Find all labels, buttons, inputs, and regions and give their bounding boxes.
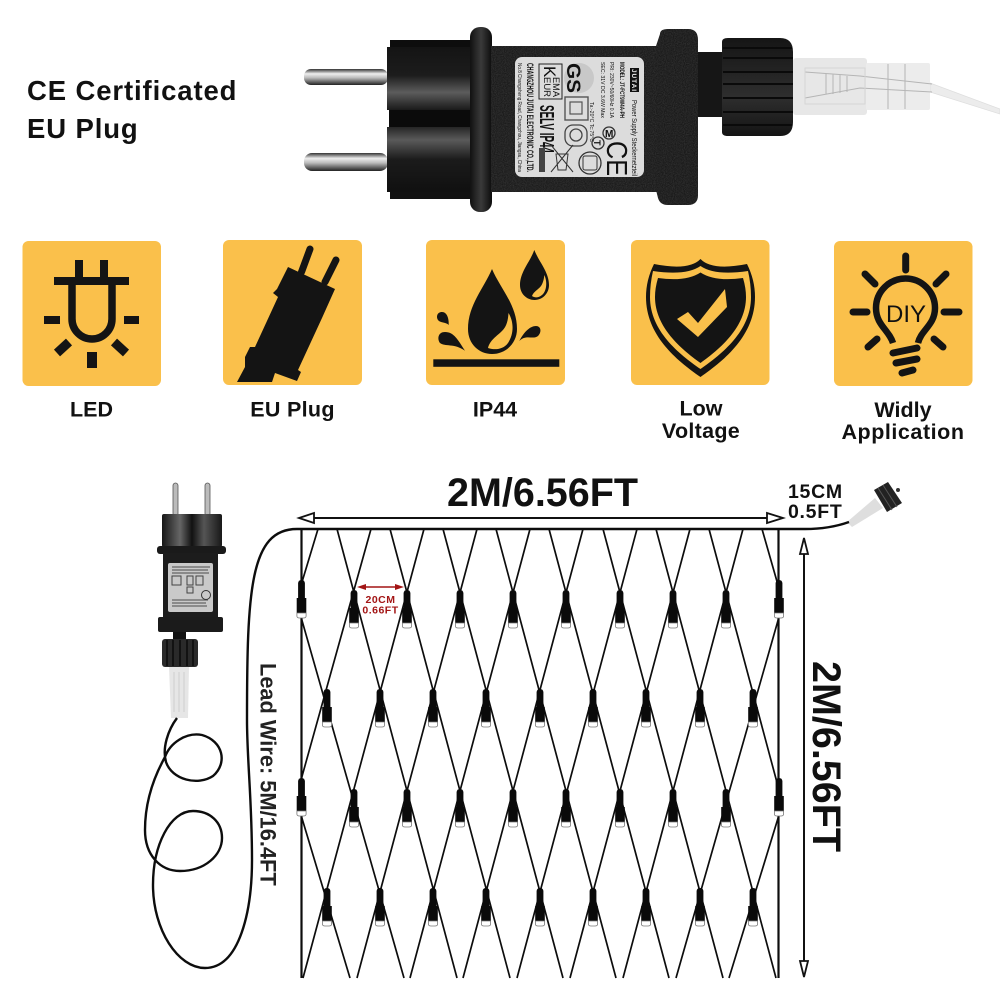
label: 15CM 0.5FT: 15CM <box>788 481 843 503</box>
product label: CHANGZHOU JUTAI ELECTRONIC CO.,LTD. <box>524 63 535 172</box>
net top rail and tail wire <box>297 522 849 529</box>
spacing callout: 20CM 0.66FT <box>357 584 404 616</box>
label: Widly Application: Widly <box>874 398 932 422</box>
label: lead wire length: Lead Wire: 5M/16.4FT <box>256 663 280 886</box>
spacing callout: 20CM 0.66FT: 20CM <box>365 594 396 606</box>
label: Widly Application <box>841 398 965 444</box>
clear connector and wire <box>793 58 1000 115</box>
label: Low Voltage <box>662 396 740 443</box>
label: Low Voltage: Voltage <box>662 419 740 443</box>
label: EU Plug: EU Plug <box>250 398 335 422</box>
plug flange <box>470 27 492 212</box>
label: Low Voltage: Low <box>680 396 723 420</box>
heading: CE Certificated EU Plug: CE Certificated <box>27 75 237 106</box>
label: IP44: IP44 <box>473 398 517 422</box>
product label: GS <box>562 63 583 93</box>
spacing callout: 20CM 0.66FT: 0.66FT <box>362 604 399 616</box>
lead wire <box>145 529 297 968</box>
width dimension arrow <box>299 513 783 523</box>
product label: CE <box>600 141 632 176</box>
small EU plug adapter <box>157 483 226 718</box>
product label: T <box>592 140 602 146</box>
product label: Ta:-20°C Tc:75°C <box>588 102 594 142</box>
product label: Power Supply Steckernetzteil <box>630 100 637 176</box>
label: LED: LED <box>70 398 113 422</box>
plug pins <box>304 69 388 171</box>
heading: CE Certificated EU Plug <box>27 75 237 144</box>
product label: JUTAI <box>630 69 637 91</box>
panel: DIY bulb icon: DIY <box>886 301 926 328</box>
product label: No.8 Changsheng Road, Changzhou, Jiangsu, China <box>516 63 522 173</box>
LED bulbs <box>297 580 784 926</box>
product label: SEC: 31V DC 3.6W Max <box>599 62 605 118</box>
product label <box>515 57 644 177</box>
panel: IP44 icon <box>426 240 565 385</box>
panel: DIY bulb icon <box>834 241 972 386</box>
panel: LED icon <box>22 241 161 386</box>
product label: EMA <box>551 77 561 97</box>
product label: MODEL: JT-FCT9W4A-PH <box>618 62 624 118</box>
product label: PRI: 230V~50/60Hz 0.1A <box>608 62 614 118</box>
label: height 2M/6.56FT: 2M/6.56FT <box>804 661 848 852</box>
label: Widly Application: Application <box>841 420 965 444</box>
panel: EU plug icon <box>223 240 362 385</box>
neck and threaded nut <box>698 38 793 136</box>
product label: SELV IP44 <box>535 105 557 153</box>
height dimension arrow <box>800 538 808 977</box>
panel: low voltage icon <box>631 240 770 385</box>
right flange <box>656 29 698 205</box>
product label: M <box>605 129 613 140</box>
label: 15CM 0.5FT: 0.5FT <box>788 501 842 523</box>
net wire grid <box>301 529 779 978</box>
label: width 2M/6.56FT: 2M/6.56FT <box>447 471 638 515</box>
product label: EUR <box>542 77 552 98</box>
heading: CE Certificated EU Plug: EU Plug <box>27 113 139 144</box>
end connector <box>847 482 902 527</box>
product label: K <box>540 66 559 78</box>
label: 15CM 0.5FT <box>788 481 843 523</box>
plug body <box>387 40 472 199</box>
adapter housing <box>491 46 663 192</box>
photo: EU plug power adapter <box>304 27 1000 212</box>
housing grain <box>491 29 698 205</box>
